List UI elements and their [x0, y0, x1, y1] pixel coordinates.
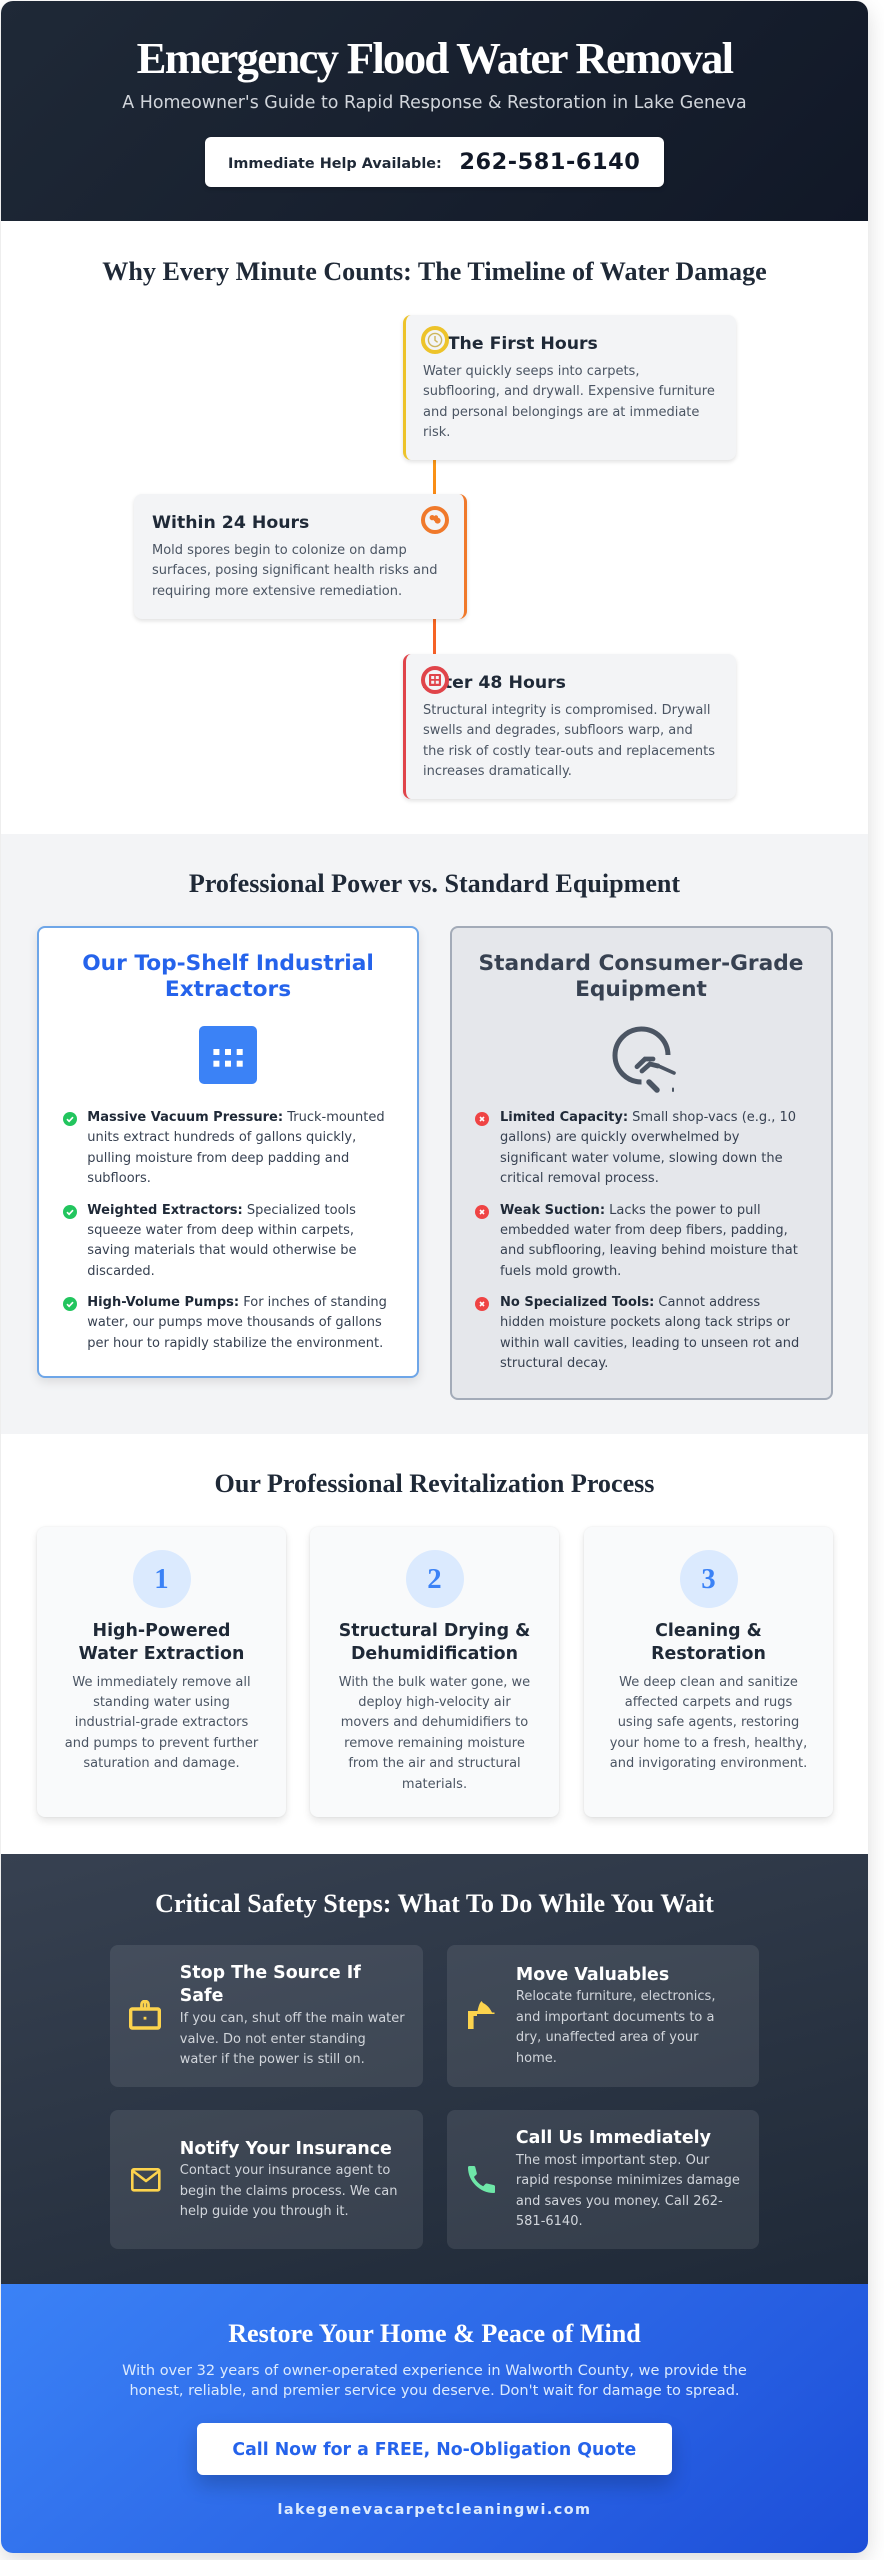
- timeline card: first hours: [403, 315, 736, 460]
- list item: limited capacity: significant water volume, slowing down the: [500, 1151, 783, 1166]
- panel: consumer-grade equipment: [450, 926, 832, 1400]
- list item: no specialized tools: [500, 1295, 799, 1371]
- icon: cross: [475, 1297, 489, 1311]
- list item: limited capacity: gallons) are quickly overwhelmed by: [500, 1130, 739, 1145]
- website link: lakegenevacarpetcleaningwi.com: [278, 2502, 592, 2518]
- heading: timeline: Why Every Minute Counts: The Timeline of Water Damage: [102, 257, 767, 286]
- card text: and saves you money. Call 262-: [516, 2194, 723, 2209]
- heading: safety: Critical Safety Steps: What To Do While You Wait: [155, 1889, 714, 1918]
- step text: materials.: [402, 1777, 467, 1792]
- step card 1: [37, 1527, 286, 1817]
- list item: weak suction: Weak Suction: Lacks the power to pull: [500, 1202, 761, 1218]
- card text: Mold spores begin to colonize on damp: [152, 543, 407, 558]
- card text: Water quickly seeps into carpets,: [423, 364, 639, 379]
- button label: Call Now for a FREE, No-Obligation Quote: [232, 2440, 636, 2460]
- card text: Structural integrity is compromised. Drywall: [423, 703, 711, 718]
- call to action text: [122, 2362, 747, 2399]
- card text: [516, 1989, 715, 2066]
- list item: vacuum pressure: [87, 1110, 385, 1186]
- icon: mold: [421, 506, 449, 534]
- card text: surfaces, posing significant health risks and: [152, 563, 437, 578]
- icon: structure grid: [421, 666, 449, 694]
- button: free quote: [197, 2423, 672, 2475]
- icon: cross: [475, 1205, 489, 1219]
- icon: check: [63, 1112, 77, 1126]
- panel heading: Extractors: [165, 977, 291, 1002]
- icon: valve case: [129, 2000, 161, 2030]
- card text: swells and degrades, subfloors warp, and: [423, 723, 693, 738]
- step text: movers and dehumidifiers to: [341, 1715, 528, 1730]
- step text: standing water using: [93, 1695, 230, 1710]
- step text: We deep clean and sanitize: [619, 1674, 798, 1690]
- card title: Move Valuables: [516, 1965, 669, 1985]
- icon: check: [63, 1205, 77, 1219]
- list item: no specialized tools: structural decay.: [500, 1356, 608, 1371]
- list item: limited capacity: critical removal process.: [500, 1171, 659, 1186]
- icon: envelope: [131, 2168, 161, 2192]
- list item: weighted extractors: [87, 1202, 357, 1279]
- icon: phone: [468, 2166, 495, 2193]
- card title: Call Us Immediately: [516, 2128, 711, 2148]
- step text: your home to a fresh, healthy,: [610, 1736, 807, 1751]
- card text: water if the power is still on.: [180, 2052, 365, 2067]
- card text: risk.: [423, 425, 450, 440]
- list item: weak suction: [500, 1202, 798, 1279]
- card text: and personal belongings are at immediate: [423, 405, 699, 420]
- card title: [180, 1963, 361, 2006]
- card title: Within 24 Hours: [152, 513, 309, 533]
- step title: [79, 1621, 244, 1664]
- card text: Relocate furniture, electronics,: [516, 1989, 715, 2004]
- step text: industrial-grade extractors: [75, 1715, 248, 1730]
- step number: [406, 1550, 464, 1608]
- step text: deploy high-velocity air: [358, 1695, 511, 1710]
- card text: valve. Do not enter standing: [180, 2032, 366, 2047]
- step title: Cleaning &: [655, 1621, 762, 1641]
- panel: header: [1, 1, 868, 221]
- step text: saturation and damage.: [83, 1756, 240, 1771]
- list item: no specialized tools: within wall cavities, leading to unseen rot and: [500, 1336, 799, 1351]
- list item: weighted extractors: discarded.: [87, 1264, 155, 1279]
- card title: In The First Hours: [423, 334, 598, 354]
- panel heading: Equipment: [575, 977, 707, 1002]
- step text: remove remaining moisture: [344, 1736, 525, 1751]
- card title: Notify Your Insurance: [180, 2139, 392, 2159]
- step card 2: [310, 1527, 559, 1817]
- icon: check: [63, 1297, 77, 1311]
- list item: high-volume pumps: High-Volume Pumps: For inches of standing: [87, 1295, 387, 1310]
- list item: high-volume pumps: [87, 1295, 387, 1351]
- list item: vacuum pressure: pulling moisture from deep padding and: [87, 1151, 349, 1166]
- timeline connector line: [433, 315, 436, 799]
- step number: 2: [427, 1563, 442, 1595]
- panel: industrial extractors: [37, 926, 419, 1378]
- step text: With the bulk water gone, we: [339, 1674, 530, 1690]
- card title: Stop The Source If: [180, 1963, 361, 1983]
- panel: equipment comparison: [1, 834, 868, 1434]
- list item: weighted extractors: saving materials that would otherwise be: [87, 1243, 357, 1258]
- safety card: call us: [446, 2110, 759, 2249]
- title: Emergency Flood Water Removal: [137, 33, 732, 83]
- panel: revitalization process: [1, 1434, 868, 1854]
- step number: [680, 1550, 738, 1608]
- panel heading: [82, 951, 374, 1002]
- card text: Contact your insurance agent to: [180, 2163, 390, 2178]
- card text: dry, unaffected area of your: [516, 2030, 698, 2045]
- panel: timeline of water damage: [1, 221, 868, 834]
- list item: weak suction: and subflooring, leaving behind moisture that: [500, 1243, 798, 1258]
- subtitle: A Homeowner's Guide to Rapid Response & Restoration in Lake Geneva: [122, 93, 747, 113]
- icon: clock: [421, 326, 449, 354]
- panel: call to action: [1, 2284, 868, 2553]
- card text: [516, 2153, 740, 2229]
- step text: [610, 1674, 807, 1771]
- step text: using safe agents, restoring: [618, 1715, 799, 1730]
- card title: After 48 Hours: [423, 673, 566, 693]
- icon: extractor: [199, 1026, 257, 1084]
- card text: and important documents to a: [516, 2010, 714, 2025]
- list item: vacuum pressure: subfloors.: [87, 1171, 151, 1186]
- card text: [423, 364, 715, 440]
- panel heading: Our Top-Shelf Industrial: [82, 951, 374, 976]
- heading: process: Our Professional Revitalization Process: [215, 1469, 654, 1498]
- card text: rapid response minimizes damage: [516, 2173, 740, 2188]
- phone callout: [205, 137, 664, 187]
- step title: Structural Drying &: [339, 1621, 530, 1641]
- card text: The most important step. Our: [516, 2153, 709, 2168]
- step text: and invigorating environment.: [610, 1756, 807, 1771]
- list item: no specialized tools: No Specialized Tools: Cannot address: [500, 1295, 760, 1310]
- step number: [132, 1550, 190, 1608]
- list item: high-volume pumps: water, our pumps move thousands of gallons: [87, 1315, 382, 1330]
- step title: Dehumidification: [351, 1644, 518, 1664]
- panel: critical safety steps: [1, 1854, 868, 2284]
- list item: vacuum pressure: units extract hundreds of gallons quickly,: [87, 1130, 356, 1145]
- card text: [152, 543, 437, 599]
- heading: comparison: Professional Power vs. Standard Equipment: [189, 869, 680, 898]
- list item: no specialized tools: hidden moisture pockets along tack strips or: [500, 1315, 790, 1330]
- card text: begin the claims process. We can: [180, 2184, 397, 2199]
- heading: call to action: Restore Your Home & Peace of Mind: [228, 2319, 641, 2348]
- step title: Restoration: [651, 1644, 766, 1664]
- list item: limited capacity: [500, 1110, 796, 1186]
- card text: subflooring, and drywall. Expensive furniture: [423, 384, 715, 399]
- card text: increases dramatically.: [423, 764, 572, 779]
- phone label: Immediate Help Available:: [228, 156, 442, 172]
- panel heading: [479, 951, 803, 1002]
- list item: vacuum pressure: Massive Vacuum Pressure: Truck-mounted: [87, 1110, 385, 1125]
- list item: weighted extractors: Weighted Extractors: Specialized tools: [87, 1202, 356, 1218]
- timeline card: within 24 hours: [134, 494, 467, 619]
- step text: from the air and structural: [348, 1756, 521, 1771]
- step text: [65, 1674, 258, 1771]
- panel heading: Standard Consumer-Grade: [479, 951, 803, 976]
- list item: high-volume pumps: per hour to rapidly stabilize the environment.: [87, 1336, 383, 1351]
- step title: [651, 1621, 766, 1664]
- step text: and pumps to prevent further: [65, 1736, 258, 1751]
- list item: weighted extractors: squeeze water from deep within carpets,: [87, 1223, 354, 1238]
- card title: Safe: [180, 1986, 223, 2006]
- card text: requiring more extensive remediation.: [152, 584, 402, 599]
- step text: affected carpets and rugs: [625, 1695, 792, 1710]
- safety card: stop the source: [110, 1945, 423, 2087]
- safety card: notify insurance: [110, 2110, 423, 2249]
- list item: weak suction: embedded water from deep fibers, padding,: [500, 1223, 788, 1238]
- phone number: 262-581-6140: [459, 149, 640, 175]
- step card 3: [584, 1527, 833, 1817]
- safety card: move valuables: [446, 1945, 759, 2087]
- step title: Water Extraction: [79, 1644, 244, 1664]
- card text: [180, 2011, 405, 2067]
- card text: home.: [516, 2051, 557, 2066]
- card text: the risk of costly tear-outs and replacements: [423, 744, 715, 759]
- list item: weak suction: fuels mold growth.: [500, 1264, 621, 1279]
- call to action text: honest, reliable, and premier service you deserve. Don't wait for damage to spread.: [129, 2383, 740, 2399]
- call to action text: With over 32 years of owner-operated experience in Walworth County, we provide the: [122, 2362, 747, 2378]
- step text: [339, 1674, 530, 1792]
- step title: High-Powered: [93, 1621, 230, 1641]
- step text: We immediately remove all: [72, 1674, 251, 1690]
- icon: shop vac: [612, 1026, 676, 1093]
- card text: [423, 703, 715, 779]
- card text: [180, 2163, 397, 2219]
- step number: 3: [701, 1563, 716, 1595]
- step title: [339, 1621, 530, 1664]
- card text: If you can, shut off the main water: [180, 2011, 405, 2026]
- step number: 1: [154, 1563, 169, 1595]
- icon: cross: [475, 1112, 489, 1126]
- icon: lamp: [468, 2001, 494, 2029]
- card text: 581-6140.: [516, 2214, 583, 2229]
- list item: limited capacity: Limited Capacity: Small shop-vacs (e.g., 10: [500, 1110, 796, 1125]
- timeline card: after 48 hours: [403, 654, 736, 799]
- card text: help guide you through it.: [180, 2204, 349, 2219]
